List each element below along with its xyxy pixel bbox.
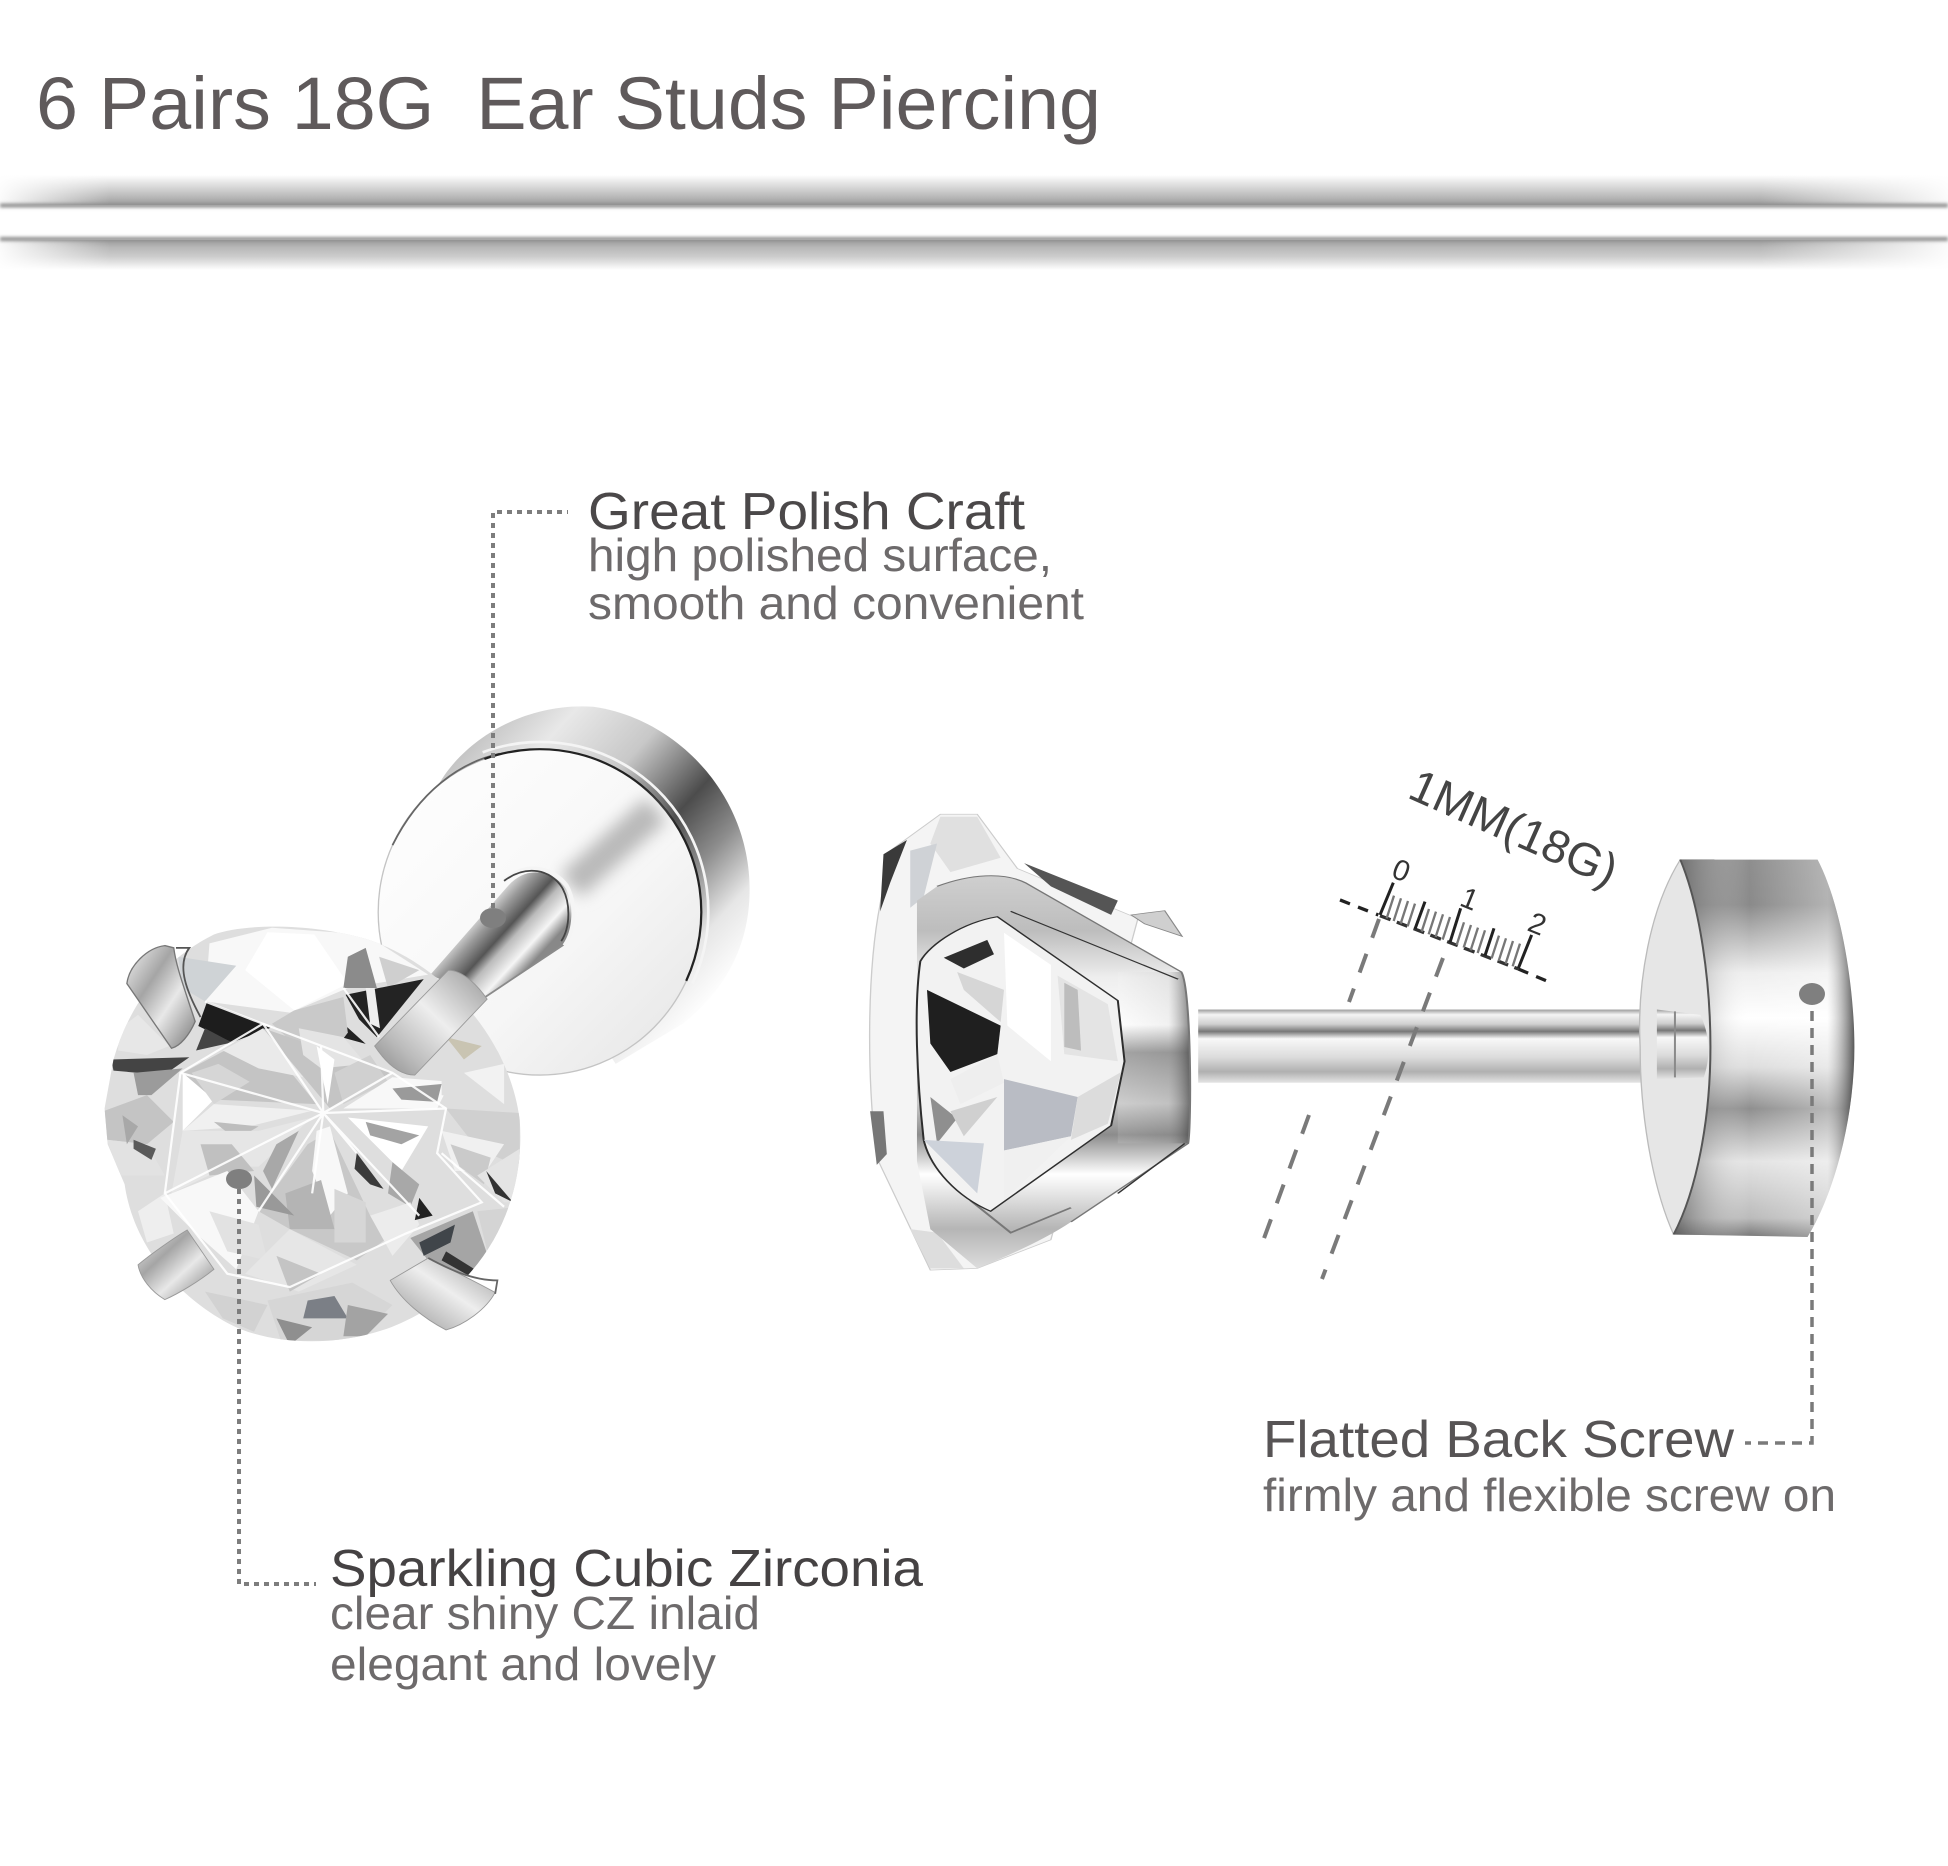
callout: sparkling cubic zirconia: Sparkling Cubic Zirconia [330,1540,923,1598]
callout: great polish craft: smooth and convenient [588,577,1084,629]
ruler [1340,853,1551,982]
back disc [1640,860,1854,1237]
collar [1657,1010,1708,1079]
earring front view [98,706,750,1354]
callout: sparkling cubic zirconia: elegant and lovely [330,1638,716,1690]
gem window [917,917,1125,1211]
post [1198,1010,1680,1083]
size label: 1MM(18G) [1402,759,1626,896]
measurement guide lines [1259,919,1443,1279]
cubic zirconia gem [98,917,531,1354]
callout: flatted back screw [1263,983,1836,1521]
prongs [127,946,497,1330]
callout: flatted back screw: firmly and flexible screw on [1263,1469,1836,1521]
ruler: 1 [1456,881,1483,918]
callout: sparkling cubic zirconia: clear shiny CZ inlaid [330,1587,760,1639]
gem side [870,814,1138,1270]
screw back disc [378,706,750,1075]
ruler: 0 [1387,853,1415,889]
callout: great polish craft: high polished surface, [588,529,1052,581]
callout: flatted back screw: Flatted Back Screw [1263,1411,1734,1469]
callout: great polish craft [480,483,1084,928]
ruler: 2 [1523,906,1551,943]
callout: great polish craft: Great Polish Craft [588,483,1026,541]
callout: sparkling cubic zirconia [226,1169,923,1690]
header [0,62,1948,275]
post [430,869,573,999]
setting [917,876,1190,1268]
earring side view [870,814,1854,1270]
title: 6 Pairs 18G Ear Studs Piercing [36,62,1101,145]
